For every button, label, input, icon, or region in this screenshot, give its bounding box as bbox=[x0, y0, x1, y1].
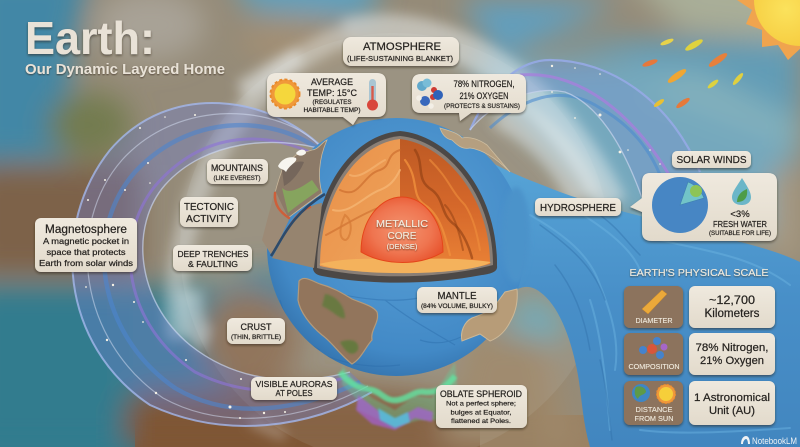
metallic core: CORE bbox=[388, 231, 417, 242]
metallic core: (DENSE) bbox=[387, 242, 418, 251]
pie chart: water on Earth bbox=[652, 177, 708, 233]
label: visible auroras: VISIBLE AURORAS bbox=[256, 379, 333, 389]
scale row: distance: DISTANCE bbox=[636, 407, 673, 414]
continent: top right edge bbox=[440, 128, 510, 172]
callout: nitrogen and oxygen: 21% OXYGEN bbox=[460, 91, 509, 102]
label: visible auroras bbox=[251, 377, 337, 400]
label: tectonic activity: TECTONIC bbox=[184, 202, 234, 213]
scale row: distance: Unit (AU) bbox=[709, 405, 755, 417]
continent: South America bbox=[298, 278, 378, 364]
label: mountains: MOUNTAINS bbox=[211, 163, 263, 173]
blend of globe into the river bbox=[502, 187, 530, 283]
callout: oblate spheroid: OBLATE SPHEROID bbox=[440, 389, 522, 399]
callout: average temperature bbox=[267, 73, 386, 125]
scale row: diameter: DIAMETER bbox=[636, 318, 672, 325]
icon: molecules bbox=[416, 78, 443, 109]
panel: freshwater share bbox=[630, 173, 777, 241]
mantle right wedge bbox=[400, 139, 490, 269]
icon: thermometer bbox=[367, 79, 378, 110]
label: solar winds: SOLAR WINDS bbox=[676, 155, 747, 166]
panel: freshwater share: <3% bbox=[730, 209, 750, 220]
panel: freshwater share: FRESH WATER bbox=[713, 220, 767, 229]
scale heading: EARTH'S PHYSICAL SCALE bbox=[630, 267, 768, 279]
scale row: composition: COMPOSITION bbox=[628, 364, 680, 371]
label: crust: CRUST bbox=[240, 322, 272, 333]
metallic core bbox=[361, 197, 443, 262]
scale row: diameter bbox=[624, 286, 775, 328]
callout: nitrogen and oxygen: 78% NITROGEN, bbox=[454, 79, 514, 90]
label: visible auroras: AT POLES bbox=[276, 388, 313, 398]
label: hydrosphere: HYDROSPHERE bbox=[540, 203, 616, 214]
mantle swirls bbox=[326, 150, 480, 258]
label: mountains bbox=[207, 159, 268, 184]
callout: atmosphere: ATMOSPHERE bbox=[363, 41, 441, 53]
callout: magnetosphere: A magnetic pocket in bbox=[43, 236, 129, 246]
scale row: diameter: ~12,700 bbox=[709, 295, 755, 307]
callout: magnetosphere bbox=[35, 218, 137, 272]
icon: molecule bbox=[639, 337, 668, 359]
icon: sun bbox=[270, 80, 300, 108]
label: tectonic activity: ACTIVITY bbox=[186, 214, 232, 225]
atmosphere dome bbox=[176, 30, 612, 447]
scale row: composition bbox=[624, 333, 775, 375]
mantle left wedge bbox=[320, 139, 402, 270]
callout: average temperature: AVERAGE bbox=[311, 77, 353, 88]
clay shading and ocean ripples bbox=[282, 295, 461, 366]
scale row: distance bbox=[624, 381, 775, 425]
cutaway shell bbox=[313, 131, 497, 283]
left magnetosphere field rings bbox=[72, 103, 372, 426]
mountain land mass bbox=[262, 140, 327, 268]
magnetosphere sparkles bbox=[85, 65, 661, 419]
label: deep trenches: DEEP TRENCHES bbox=[178, 249, 249, 259]
title: Earth: bbox=[25, 12, 155, 64]
mantle bottom slab bbox=[319, 259, 491, 273]
callout: magnetosphere: space that protects bbox=[46, 247, 126, 257]
right magnetosphere field rings bbox=[470, 60, 700, 200]
icon: water drop bbox=[732, 178, 751, 205]
callout: oblate spheroid: flattened at Poles. bbox=[451, 418, 511, 425]
dark ridge shadow bbox=[282, 161, 304, 186]
label: hydrosphere bbox=[535, 198, 621, 216]
label: deep trenches bbox=[173, 245, 252, 271]
callout: atmosphere: (LIFE-SUSTAINING BLANKET) bbox=[347, 54, 453, 63]
icon: sun bbox=[656, 384, 676, 404]
scale row: composition: 21% Oxygen bbox=[700, 355, 764, 367]
label: deep trenches: & FAULTING bbox=[188, 259, 238, 269]
solar wind particles bbox=[642, 37, 745, 110]
callout: magnetosphere: Earth from solar winds bbox=[39, 258, 133, 268]
scale row: composition: 78% Nitrogen, bbox=[696, 342, 768, 354]
Earth globe bbox=[267, 118, 530, 376]
callout: nitrogen and oxygen: (PROTECTS & SUSTAINS) bbox=[444, 103, 520, 110]
trench lines bbox=[275, 193, 310, 233]
panel: freshwater share: (SUITABLE FOR LIFE) bbox=[709, 230, 771, 237]
label: mantle: MANTLE bbox=[438, 291, 477, 302]
label: crust: (THIN, BRITTLE) bbox=[231, 334, 281, 341]
lower rock chunk bbox=[272, 203, 322, 268]
label: solar winds bbox=[672, 151, 751, 168]
icon: ruler bbox=[642, 290, 667, 314]
green foothills bbox=[282, 180, 319, 213]
continent: right tan land bbox=[461, 289, 517, 341]
label: mountains: (LIKE EVEREST) bbox=[214, 175, 260, 182]
callout: average temperature: (REGULATES bbox=[312, 99, 352, 106]
scale row: diameter: Kilometers bbox=[704, 308, 760, 320]
scale row: distance: 1 Astronomical bbox=[694, 392, 770, 404]
icon: earth bbox=[632, 384, 650, 402]
label: mantle bbox=[417, 287, 497, 313]
callout: average temperature: HABITABLE TEMP) bbox=[304, 107, 360, 114]
title: Our Dynamic Layered Home bbox=[25, 61, 225, 78]
label: crust bbox=[227, 318, 285, 344]
callout: average temperature: TEMP: 15°C bbox=[307, 88, 357, 99]
hydrosphere river bbox=[470, 150, 800, 447]
callout: atmosphere bbox=[343, 37, 459, 66]
solar sun bbox=[737, 0, 800, 60]
metallic core: METALLIC bbox=[376, 219, 428, 230]
callout: nitrogen and oxygen bbox=[412, 74, 526, 121]
South America forest bbox=[322, 294, 345, 318]
callout: oblate spheroid: Not a perfect sphere; bbox=[446, 400, 516, 408]
snow caps bbox=[278, 150, 306, 172]
upper mountain body bbox=[275, 140, 327, 218]
label: tectonic activity bbox=[180, 197, 238, 227]
title bbox=[25, 12, 225, 78]
label: mantle: (84% VOLUME, BULKY) bbox=[421, 303, 493, 310]
callout: magnetosphere: Magnetosphere bbox=[45, 224, 127, 236]
callout: oblate spheroid: bulges at Equator, bbox=[450, 410, 512, 416]
left rock chunk bbox=[262, 190, 289, 256]
scale row: distance: FROM SUN bbox=[634, 416, 674, 423]
callout: oblate spheroid bbox=[436, 385, 527, 428]
aurora at south pole bbox=[340, 362, 458, 430]
